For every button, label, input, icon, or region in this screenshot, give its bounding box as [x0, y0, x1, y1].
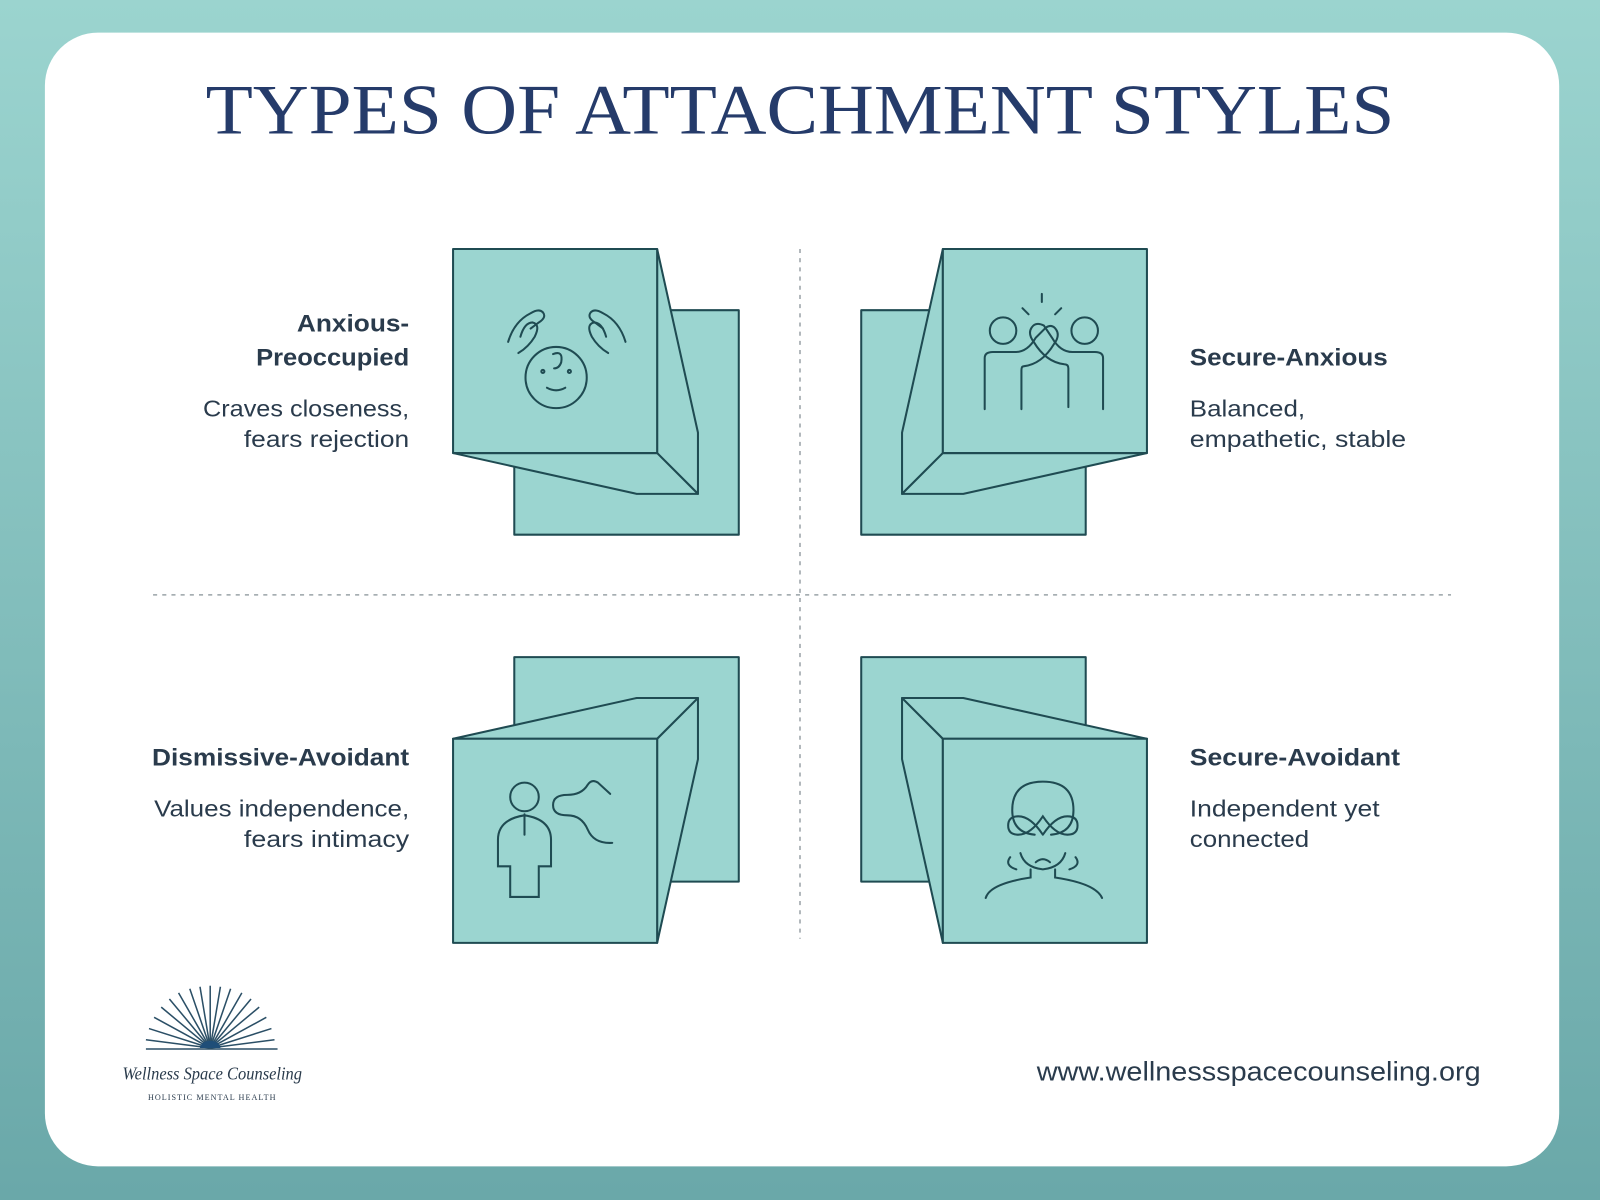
text: dismissive-avoidant [152, 744, 409, 852]
text: secure-anxious: Balanced, [1190, 395, 1305, 421]
icon: hands over baby [508, 310, 626, 408]
text: anxious-preoccupied: fears rejection [244, 426, 409, 452]
icon: high five [985, 294, 1103, 409]
logo [122, 986, 302, 1102]
text: secure-avoidant: Secure-Avoidant [1190, 744, 1400, 771]
icon: woman with infinity mask [986, 782, 1102, 898]
cube: dismissive-avoidant [453, 657, 739, 943]
text: secure-avoidant: Independent yet [1190, 795, 1380, 821]
cube: secure-avoidant [861, 657, 1147, 943]
logo: Wellness Space Counseling [122, 1064, 302, 1084]
text: anxious-preoccupied [203, 311, 409, 452]
text: secure-avoidant [1190, 744, 1400, 852]
icon: person with snake [498, 781, 612, 897]
text: anxious-preoccupied: Craves closeness, [203, 395, 409, 421]
cube: anxious-preoccupied [453, 249, 739, 535]
website url: www.wellnessspacecounseling.org [1036, 1057, 1481, 1087]
text: secure-anxious: Secure-Anxious [1190, 344, 1388, 371]
text: secure-anxious: empathetic, stable [1190, 426, 1406, 452]
logo: HOLISTIC MENTAL HEALTH [148, 1093, 277, 1102]
text: anxious-preoccupied: Anxious- [297, 311, 409, 338]
text: dismissive-avoidant: Values independence, [154, 795, 409, 821]
text: anxious-preoccupied: Preoccupied [256, 344, 409, 371]
text: secure-anxious [1190, 344, 1406, 452]
text: secure-avoidant: connected [1190, 826, 1309, 852]
text: dismissive-avoidant: Dismissive-Avoidant [152, 744, 409, 771]
cube: secure-anxious [861, 249, 1147, 535]
text: dismissive-avoidant: fears intimacy [244, 826, 409, 852]
title: TYPES OF ATTACHMENT STYLES [206, 71, 1394, 150]
